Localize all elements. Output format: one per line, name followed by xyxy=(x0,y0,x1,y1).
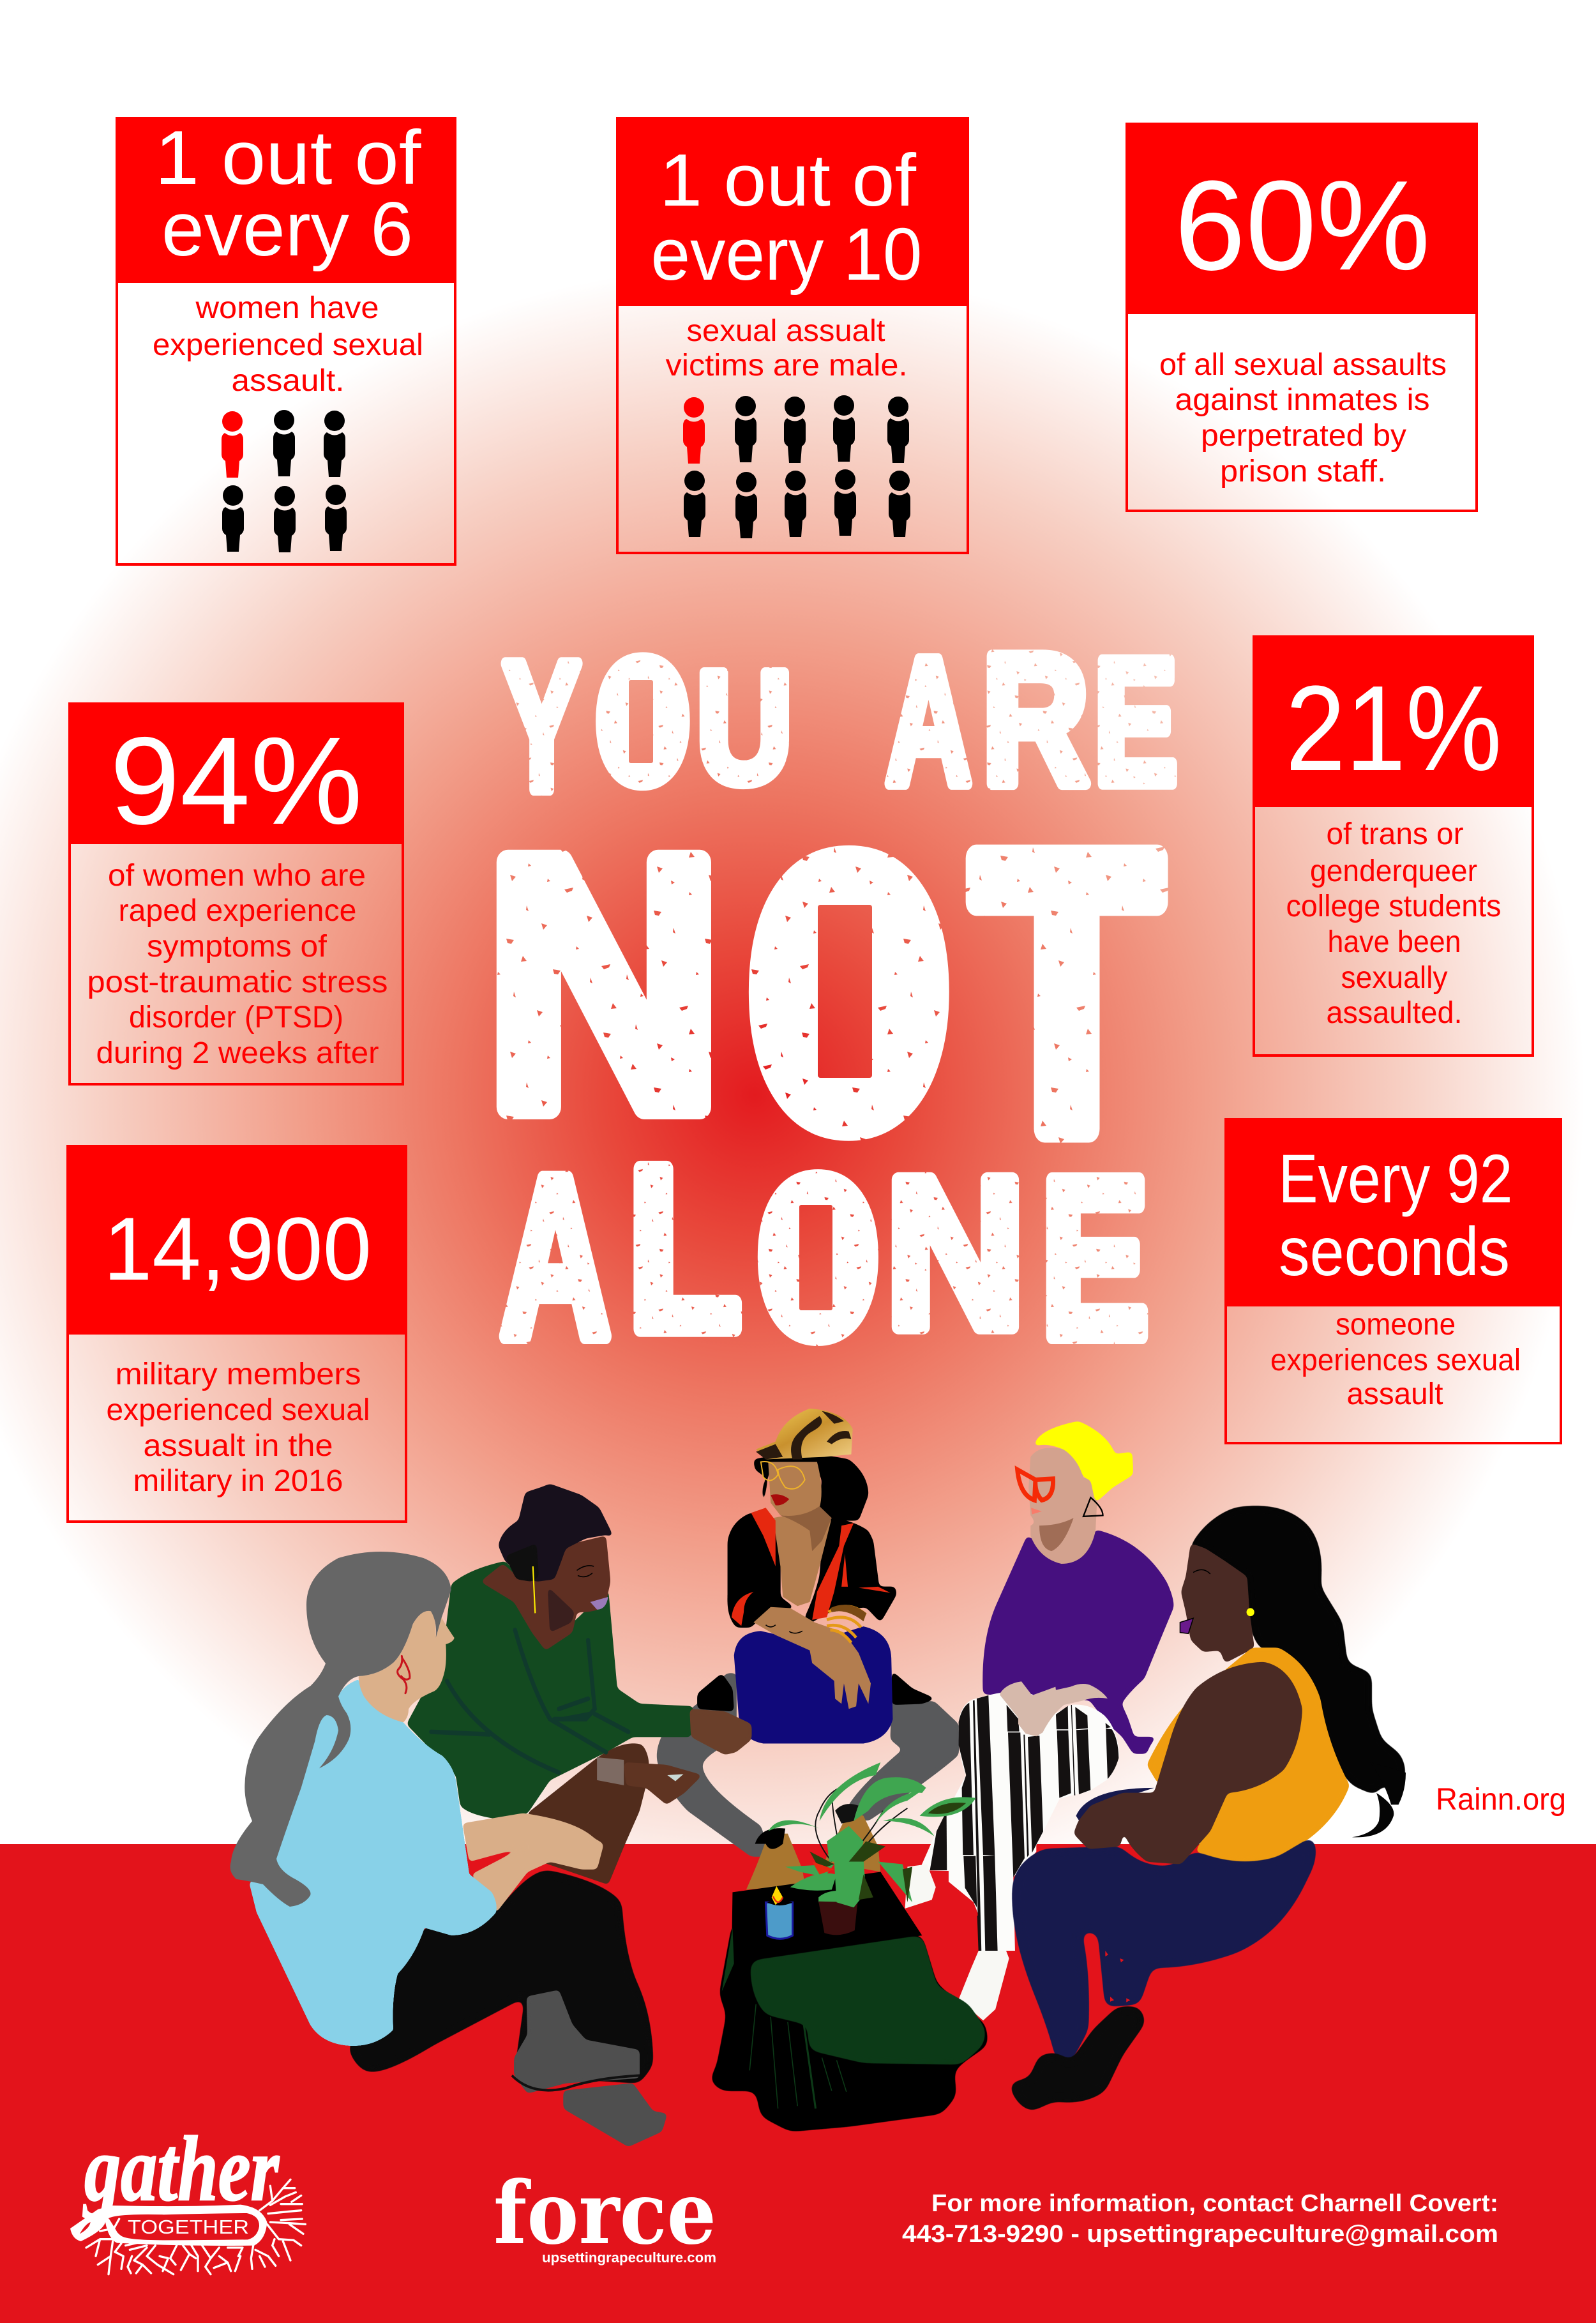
title line: NOT: T xyxy=(973,774,1161,1213)
body text: sexually xyxy=(1341,961,1448,995)
title line: YOU ARE: A xyxy=(885,621,972,822)
body text: experiences sexual xyxy=(1270,1343,1521,1377)
body text: have been xyxy=(1328,925,1461,959)
title line: NOT xyxy=(497,844,1168,1143)
body text xyxy=(153,291,423,398)
contact information: For more information, contact Charnell Covert: xyxy=(931,2190,1498,2217)
panel header xyxy=(1125,123,1478,314)
title line: YOU ARE: Y xyxy=(503,624,580,828)
logo word: gather: gather xyxy=(83,2118,280,2220)
title line: ALONE: N xyxy=(885,1133,1025,1372)
body text: military members xyxy=(115,1358,361,1391)
heading: 94%: 94% xyxy=(110,711,363,851)
heading: 1 out of every 6: every 6 xyxy=(162,186,413,272)
heading: 60%: 60% xyxy=(1175,155,1430,297)
title line: NOT: N xyxy=(486,785,722,1183)
heading: 14,900: 14,900 xyxy=(103,1199,372,1299)
body text: assaulted. xyxy=(1327,996,1462,1030)
logo url: upsettingrapeculture.com xyxy=(542,2250,716,2266)
body text: sexual assualt xyxy=(687,314,885,348)
figure: woman with grey hair xyxy=(230,1552,667,2147)
heading: 1 out of every 10: 1 out of xyxy=(659,139,917,222)
panel: 60 percent xyxy=(1125,123,1478,511)
panel header xyxy=(1253,635,1534,807)
body text: victims are male. xyxy=(665,349,908,382)
body text: assault. xyxy=(231,364,345,398)
contact information: 443-713-9290 - upsettingrapeculture@gmail.com xyxy=(902,2221,1498,2248)
body text: assault xyxy=(1347,1377,1443,1411)
title line: YOU ARE: U xyxy=(696,639,792,816)
body text: military in 2016 xyxy=(133,1464,343,1498)
heading: 1 out of every 6: 1 out of xyxy=(154,115,421,201)
title: You are not alone xyxy=(497,649,1177,1346)
heading: every 92 seconds xyxy=(1278,1140,1513,1290)
title line: ALONE: A xyxy=(501,1130,610,1385)
title line: YOU ARE: O xyxy=(596,624,689,819)
logo word: TOGETHER: TOGETHER xyxy=(128,2216,249,2238)
body text xyxy=(106,1358,370,1498)
title line: ALONE: E xyxy=(1041,1131,1148,1385)
icon: six people, one red xyxy=(222,410,347,552)
striped trousers xyxy=(919,1681,1119,1951)
body text: perpetrated by xyxy=(1201,419,1406,453)
body text xyxy=(665,314,908,382)
figure: woman in orange top xyxy=(1009,1506,1406,2111)
panel header xyxy=(616,117,969,306)
body text: someone xyxy=(1336,1308,1456,1342)
logo: gather together xyxy=(70,2118,305,2274)
body text: women have xyxy=(195,291,379,325)
body text: college students xyxy=(1286,889,1502,923)
icon: ten people, one red xyxy=(683,395,910,538)
panel: 21 percent xyxy=(1253,635,1534,1056)
panel header xyxy=(68,702,404,844)
body text: raped experience xyxy=(119,894,356,928)
body text: symptoms of xyxy=(147,930,327,964)
logo: force xyxy=(493,2162,716,2266)
heading: every 92 seconds: seconds xyxy=(1279,1213,1510,1290)
red floor band xyxy=(0,1844,1596,2323)
body text: assualt in the xyxy=(143,1429,333,1463)
body text: disorder (PTSD) xyxy=(129,1001,343,1034)
illustration: women in circle xyxy=(230,1409,1406,2147)
body text: experienced sexual xyxy=(106,1393,370,1427)
title line: ALONE xyxy=(499,1161,1148,1346)
title line: ALONE: O xyxy=(758,1135,878,1381)
table and plant xyxy=(709,1762,988,2131)
title line: YOU ARE: E xyxy=(1094,623,1178,822)
body text xyxy=(1159,348,1447,488)
title line: NOT: O xyxy=(749,785,949,1199)
figure: woman in green top xyxy=(407,1484,751,1884)
panel: 1 out of every 10 xyxy=(616,117,969,553)
body text xyxy=(1286,817,1502,1030)
panel: 1 out of every 6 xyxy=(116,115,456,564)
body text: against inmates is xyxy=(1175,383,1430,417)
body text xyxy=(87,859,388,1070)
heading: every 92 seconds: Every 92 xyxy=(1278,1140,1513,1217)
panel header xyxy=(66,1145,407,1335)
body text: post-traumatic stress xyxy=(87,965,388,999)
panel header xyxy=(116,117,456,283)
body text: during 2 weeks after xyxy=(96,1036,379,1070)
heading: 1 out of every 6 xyxy=(154,115,421,272)
body text: prison staff. xyxy=(1220,455,1386,488)
body text: of trans or xyxy=(1327,817,1464,851)
body text: genderqueer xyxy=(1310,854,1477,888)
panel: 14,900 xyxy=(66,1145,407,1522)
logo ring and roots xyxy=(70,2179,305,2274)
figure: purple-top woman xyxy=(919,1421,1174,2020)
heading: 1 out of every 10: every 10 xyxy=(651,213,922,296)
source: Rainn.org: Rainn.org xyxy=(1436,1783,1566,1817)
body text: of all sexual assaults xyxy=(1159,348,1447,382)
body text: of women who are xyxy=(108,859,366,893)
panel: 94 percent xyxy=(68,702,404,1084)
panel header xyxy=(1224,1118,1562,1306)
logo word: force: force xyxy=(493,2162,716,2264)
contact information xyxy=(902,2190,1498,2248)
title line: YOU ARE xyxy=(501,649,1177,796)
body text: experienced sexual xyxy=(153,328,423,362)
body text xyxy=(1270,1308,1521,1411)
title line: YOU ARE: R xyxy=(982,616,1089,823)
title line: ALONE: L xyxy=(628,1119,741,1378)
heading: 1 out of every 10 xyxy=(651,139,922,296)
figure: centre woman xyxy=(657,1409,959,1857)
panel: every 92 seconds xyxy=(1224,1118,1562,1443)
heading: 21%: 21% xyxy=(1286,661,1502,796)
